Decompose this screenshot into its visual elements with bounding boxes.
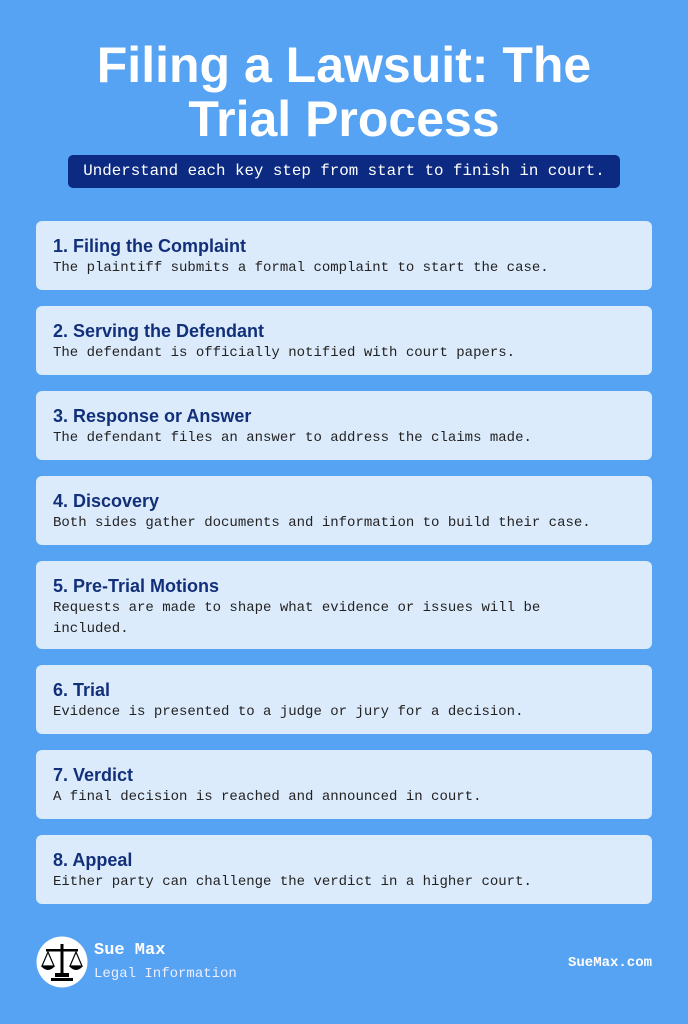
- card 8: Either party can challenge the verdict in a higher court.: [53, 874, 532, 890]
- card 2: [36, 306, 652, 375]
- card 1: The plaintiff submits a formal complaint to start the case.: [53, 260, 549, 276]
- card 4: Both sides gather documents and information to build their case.: [53, 515, 591, 531]
- title: [97, 37, 591, 147]
- card 6: 6. Trial: [53, 680, 110, 700]
- brand text: Sue Max: [94, 941, 165, 960]
- icon: scales logo: [36, 936, 88, 988]
- card 6: [36, 665, 652, 734]
- card 1: [36, 221, 652, 290]
- title: Trial Process: [188, 91, 500, 147]
- card 7: [36, 750, 652, 819]
- title: Filing a Lawsuit: The: [97, 37, 591, 93]
- card 3: The defendant files an answer to address the claims made.: [53, 430, 532, 446]
- subtitle banner: [68, 155, 620, 188]
- card 7: 7. Verdict: [53, 765, 133, 785]
- card 2: 2. Serving the Defendant: [53, 321, 264, 341]
- card 5: Requests are made to shape what evidence or issues will be included.: [53, 600, 540, 637]
- card 4: 4. Discovery: [53, 491, 159, 511]
- card 5: 5. Pre-Trial Motions: [53, 576, 219, 596]
- card 4: [36, 476, 652, 545]
- card 2: The defendant is officially notified with court papers.: [53, 345, 515, 361]
- footer: [36, 936, 652, 988]
- card 3: 3. Response or Answer: [53, 406, 251, 426]
- card 5: [36, 561, 652, 649]
- card 7: A final decision is reached and announced in court.: [53, 789, 481, 805]
- website: SueMax.com: [568, 955, 652, 971]
- brand text: [94, 941, 237, 982]
- card 8: [36, 835, 652, 904]
- subtitle banner: Understand each key step from start to finish in court.: [83, 162, 605, 180]
- card 8: 8. Appeal: [53, 850, 132, 870]
- card 1: 1. Filing the Complaint: [53, 236, 246, 256]
- card 3: [36, 391, 652, 460]
- card 6: Evidence is presented to a judge or jury for a decision.: [53, 704, 523, 720]
- brand text: Legal Information: [94, 966, 237, 982]
